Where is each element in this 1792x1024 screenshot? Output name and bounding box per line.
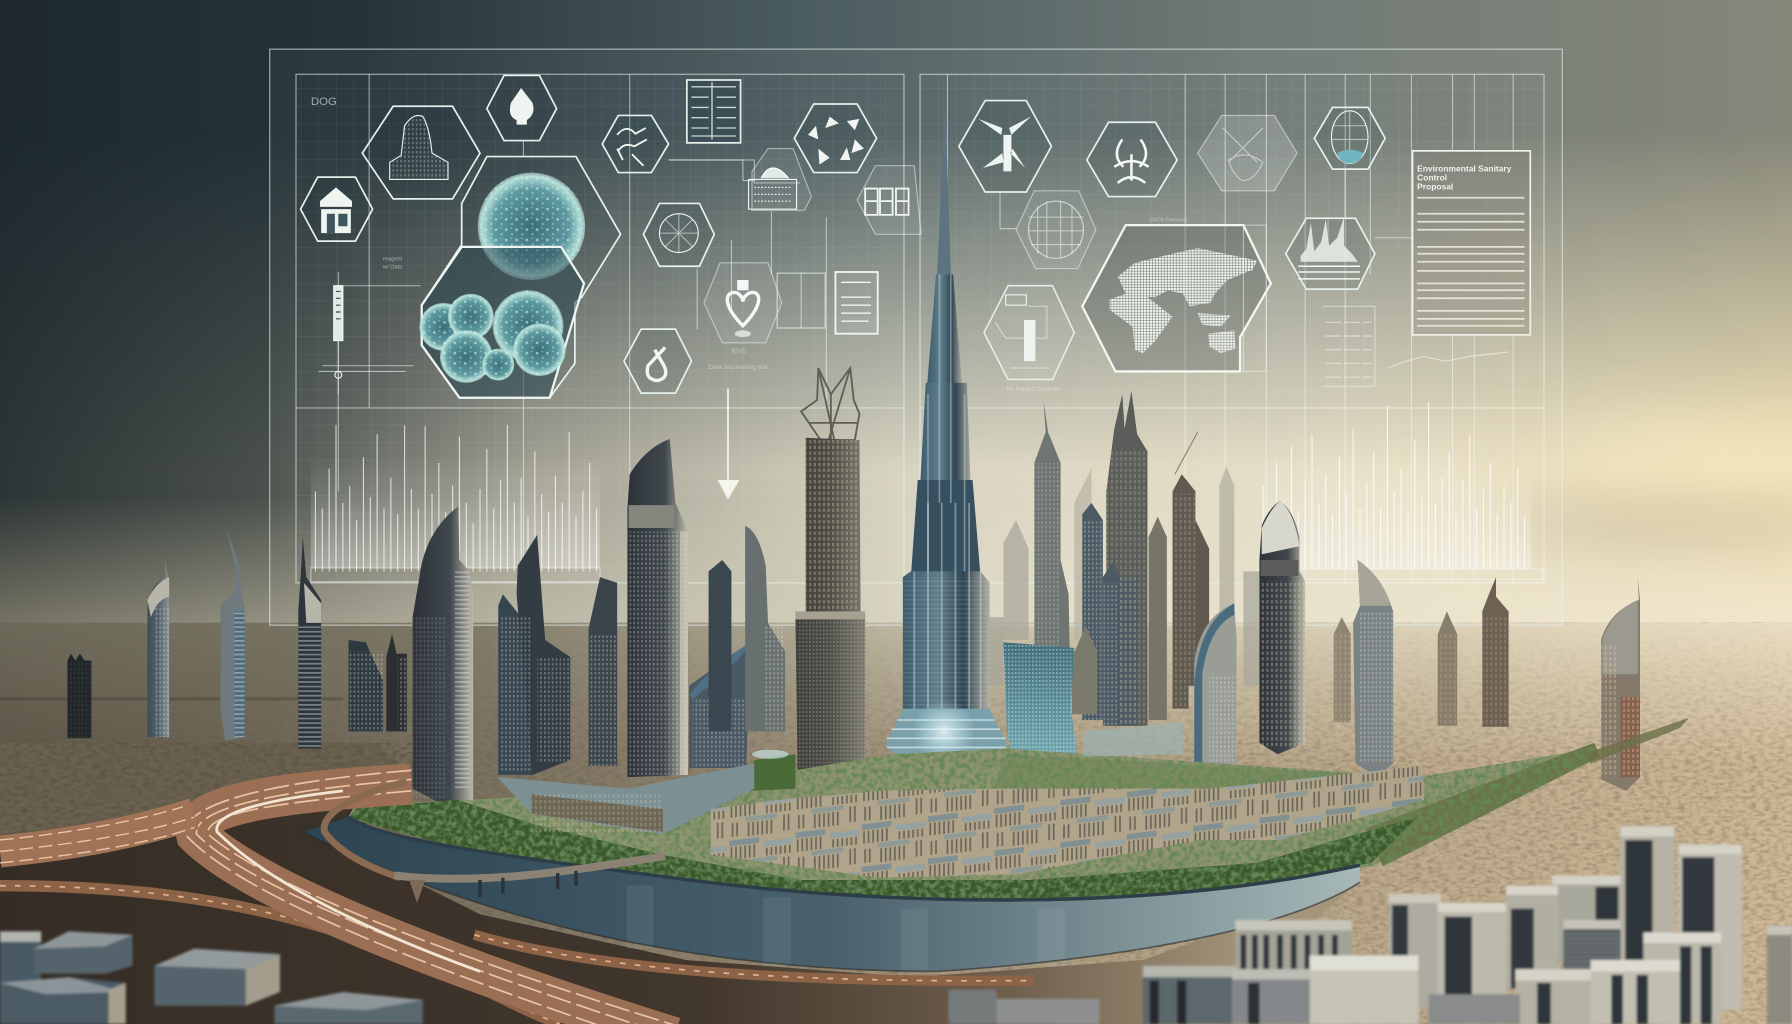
icon: document table [687, 80, 741, 143]
road: inner ramp [324, 782, 407, 878]
icon: knot hexagon [624, 329, 691, 393]
icon: lab machine hexagon [984, 286, 1074, 379]
icon: world map hexagon [1082, 225, 1271, 371]
tower: domed tower [1259, 501, 1305, 754]
icon: house hexagon [301, 177, 373, 241]
block group 4 [0, 977, 126, 1024]
left city texture [0, 743, 411, 834]
tower: slim 1 [1334, 617, 1351, 722]
block 8 [1643, 933, 1721, 1024]
tower: twin mid towers [349, 634, 407, 731]
holographic data panel [270, 49, 1562, 625]
spike chart right [1257, 402, 1543, 579]
icon: globe hexagon [643, 203, 714, 266]
caption: mid left labels: RIVD [731, 348, 746, 355]
icon: syringe [319, 286, 406, 394]
block 2 [1679, 845, 1742, 1010]
tower: curved fin [689, 643, 750, 768]
skyline: right outlying towers [1334, 560, 1640, 791]
icon: leaf hexagon [1198, 115, 1297, 191]
icon: bulb hexagon [487, 75, 557, 141]
caption: small note: reagent [383, 257, 402, 263]
icon: biohazard hexagon [1087, 122, 1177, 197]
connector lines [322, 141, 1413, 491]
skyline: distant hazy towers [978, 466, 1259, 686]
report card [1413, 151, 1530, 335]
block group 3 [154, 949, 280, 1006]
tower: rear slim [589, 577, 617, 766]
block 5 [1438, 903, 1506, 1022]
down arrow [718, 389, 739, 499]
upper planting [749, 750, 1423, 800]
road: right branch [474, 935, 1034, 981]
label: map title: DATA Forecast [1150, 218, 1188, 224]
text list sheet [1322, 306, 1375, 386]
skyline: right cluster towers [1003, 391, 1305, 786]
spike chart left [311, 425, 600, 582]
block 1 [1621, 826, 1674, 981]
report body lines [1417, 198, 1525, 326]
outer green rows [1366, 718, 1689, 866]
island base [349, 749, 1594, 905]
sky background [0, 0, 1792, 651]
road: left straight [0, 807, 194, 863]
block 13 [1515, 969, 1613, 1024]
block 14 [1591, 960, 1680, 1024]
green island district [349, 718, 1689, 905]
road: main curve [185, 770, 686, 1024]
tower: striped tower [298, 537, 321, 749]
Burj upper tiers [911, 274, 981, 577]
block group 1 [0, 931, 41, 994]
icon: report sheet [835, 272, 878, 334]
tower: curved main [413, 506, 473, 809]
block 4 [1389, 894, 1441, 1008]
report heading: Control [1417, 173, 1447, 183]
skyline: left outlying towers [67, 529, 407, 749]
panel: outer frame [270, 49, 1562, 625]
block 9 [1235, 920, 1352, 973]
skyline: Burj tower [886, 101, 1007, 763]
tower: blue glass [1003, 642, 1080, 786]
cell cluster [419, 290, 566, 383]
Burj glow [912, 699, 976, 763]
large virus cell [478, 173, 585, 280]
report heading: Proposal [1417, 182, 1453, 192]
block 3 [1552, 875, 1621, 961]
world map dots [1110, 248, 1257, 353]
icon: circular arrows hexagon [602, 115, 669, 173]
icon: tower sketch hexagon [362, 106, 480, 199]
waterfront trees [349, 800, 1417, 905]
icon: blank chart box [777, 273, 825, 328]
tower: cluster behind [498, 535, 570, 775]
highway network [0, 770, 1034, 1024]
tower: cathedral spires [1034, 400, 1070, 651]
tower: slim rear pair [709, 526, 785, 731]
Burj podium [886, 709, 1007, 761]
tower: curved arc [1194, 603, 1237, 782]
icon: heart hexagon [704, 263, 782, 343]
icon: bar chart hexagon [1286, 217, 1375, 289]
foreground blocks right [949, 826, 1792, 1024]
icon: large cell hexagon [419, 157, 621, 398]
Burj lower tiers [903, 503, 990, 714]
panel: left grid [296, 74, 904, 583]
road: overpass bridge [394, 856, 665, 903]
glass plaza [1083, 722, 1183, 757]
inner cluster hexagon [422, 247, 584, 398]
label: DOG: DOG [311, 96, 337, 108]
block 6 [1506, 886, 1558, 989]
report heading: Environmental Sanitary [1417, 163, 1511, 173]
line chart [1389, 352, 1509, 368]
tower: curved far right [1601, 577, 1640, 791]
icon: ring glyphs hexagon [794, 104, 877, 173]
tower: spire tower 2 [221, 529, 245, 741]
Burj spire [937, 101, 951, 274]
tower: slim 2 [1438, 611, 1457, 726]
block 12 [1232, 969, 1310, 1024]
dark verge below roads [0, 779, 1360, 1024]
low-rise: district blocks [711, 766, 1424, 878]
block 17 [1429, 994, 1520, 1024]
icon: dome building [669, 149, 811, 210]
block 16 [949, 990, 1099, 1024]
tower: spire tower 1 [147, 558, 169, 737]
desert ground [0, 623, 1792, 1024]
block 11 [1143, 966, 1237, 1024]
foreground blocks left [0, 931, 423, 1024]
caption: small note: w/ Data [382, 265, 403, 271]
tower: slim 3 [1482, 577, 1509, 727]
skyline: main left towers [413, 368, 865, 809]
caption: mid left labels: Data sequencing trial [709, 364, 767, 371]
icon: map grid hexagon [1016, 191, 1096, 269]
tower: dark block [67, 654, 91, 738]
canal water [303, 817, 1360, 971]
block 7 [1563, 920, 1621, 983]
road: lower loop [0, 886, 560, 1024]
tower: central dark [627, 439, 688, 777]
block 15 [1767, 926, 1792, 1024]
caption: lower right labels: Bit Impact Controls [1007, 386, 1060, 393]
icon: turbine hexagon [959, 101, 1051, 192]
block group 2 [34, 931, 133, 974]
block 10 [1310, 955, 1418, 1024]
tower: striped mid [1072, 560, 1137, 726]
tower: rear spires [1082, 391, 1209, 726]
tower: blade [1353, 560, 1393, 777]
tower: crowned tower [795, 368, 865, 781]
icon: glyph hexagon [857, 166, 921, 234]
block group 5 [274, 992, 423, 1024]
icon: oval globe hexagon [1314, 107, 1385, 169]
low-rise: glass podium [497, 763, 754, 834]
panel: right grid [920, 74, 1544, 583]
